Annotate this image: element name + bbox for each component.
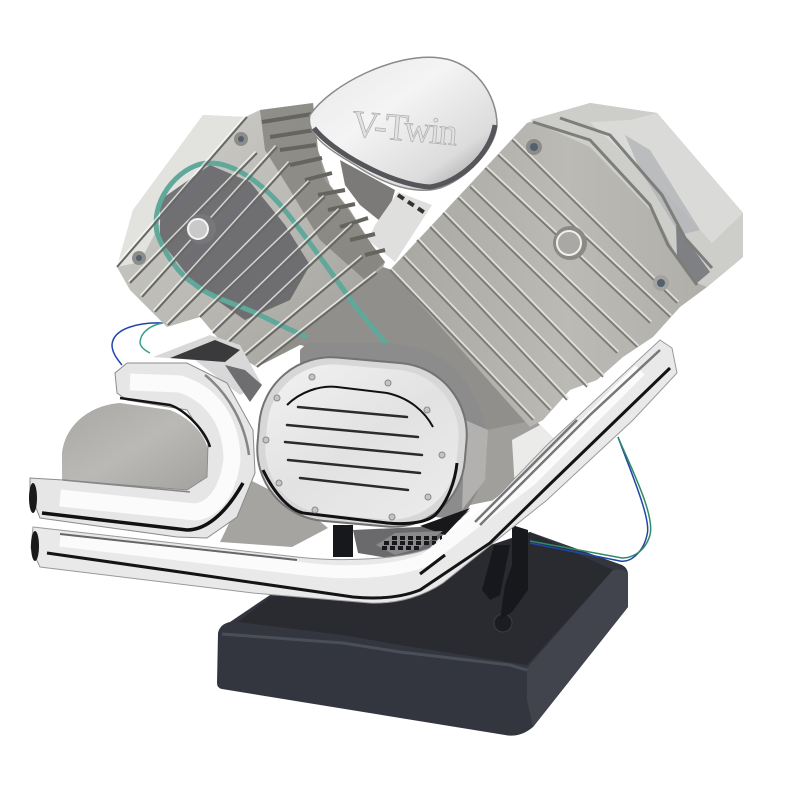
base bbox=[217, 532, 628, 736]
screws, right bbox=[526, 139, 542, 155]
pivot, right bbox=[553, 226, 587, 260]
vent grille bbox=[353, 508, 470, 560]
base knob bbox=[494, 614, 512, 632]
stand posts bbox=[333, 525, 528, 620]
air filter cover bbox=[309, 57, 497, 190]
left head cap bbox=[117, 115, 245, 267]
right head cap bbox=[530, 103, 743, 287]
stepped fin shadows bbox=[260, 103, 385, 280]
screws, left bbox=[234, 132, 248, 146]
V-Twin label: V-Twin bbox=[350, 103, 459, 154]
bracket under left cylinder bbox=[153, 335, 262, 402]
cover slots bbox=[285, 407, 422, 490]
right cylinder bbox=[390, 103, 743, 427]
fin ridges, left bbox=[116, 116, 376, 366]
oval chrome cover bbox=[251, 351, 473, 533]
fin ridges, right bbox=[392, 138, 678, 418]
pivot, left bbox=[186, 214, 216, 244]
wires bbox=[112, 323, 651, 561]
upper exhaust pipe bbox=[29, 363, 255, 538]
drive belt bbox=[156, 163, 387, 345]
rear silver drum bbox=[62, 403, 328, 547]
cover rivets bbox=[263, 374, 445, 520]
lower exhaust pipe bbox=[31, 340, 677, 603]
flywheel bbox=[160, 165, 310, 320]
round drum housing bbox=[300, 343, 488, 520]
crankcase body bbox=[257, 160, 560, 505]
left cylinder bbox=[116, 103, 387, 367]
